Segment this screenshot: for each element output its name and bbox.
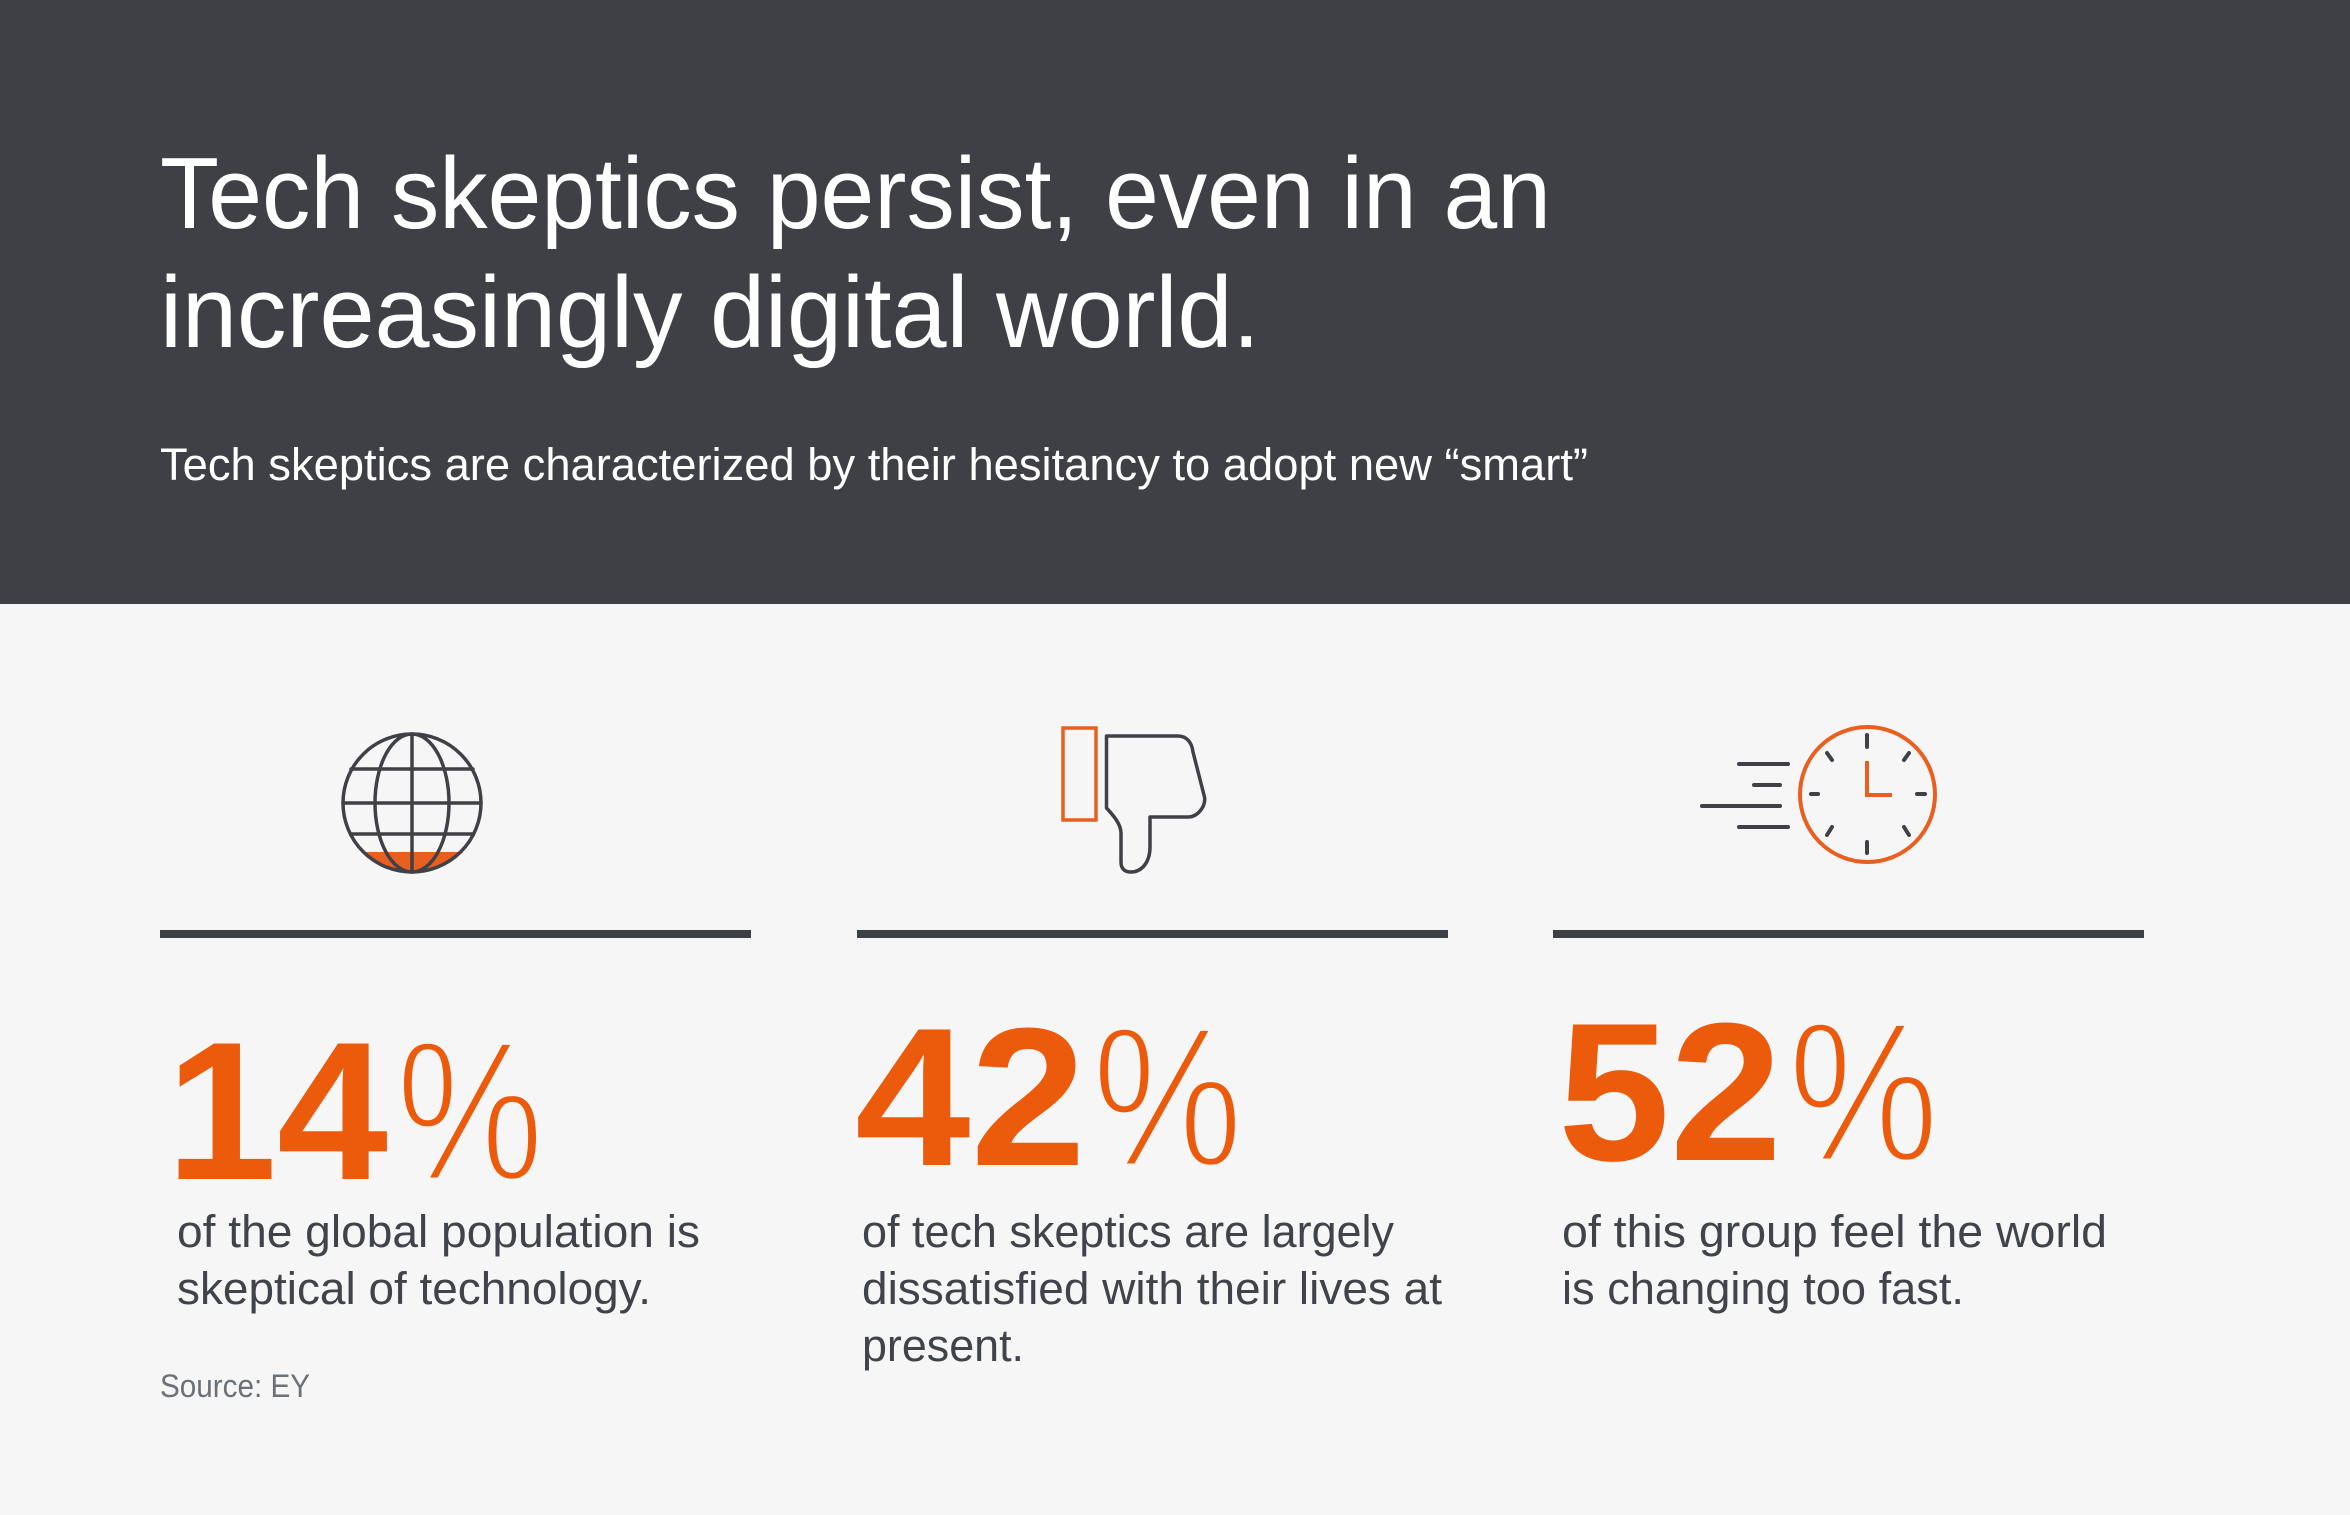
description: skeptical of technology. (177, 1263, 651, 1314)
subtitle: Tech skeptics are characterized by their hesitancy to adopt new “smart” (160, 439, 1588, 490)
source: Source: EY (160, 1368, 310, 1404)
big number 52%: 52 (1558, 982, 1782, 1202)
divider (857, 930, 1448, 938)
big number 42%: 42 (855, 987, 1086, 1207)
big number 52%: % (1788, 981, 1939, 1204)
big number 14%: 14 (166, 1001, 388, 1221)
description: of this group feel the world (1562, 1206, 2107, 1257)
big number 52% (1558, 981, 1939, 1204)
divider (1553, 930, 2144, 938)
divider (160, 930, 751, 938)
description (1562, 1206, 2107, 1314)
big number 42% (855, 986, 1243, 1209)
big number 14% (166, 1000, 544, 1223)
panel: stat 52% (1553, 727, 2144, 1314)
description: is changing too fast. (1562, 1263, 1964, 1314)
icon: fast clock (1702, 727, 1935, 862)
description: present. (862, 1320, 1024, 1371)
description: of the global population is (177, 1206, 700, 1257)
title: Tech skeptics persist, even in an (160, 138, 1551, 250)
description: of tech skeptics are largely (862, 1206, 1394, 1257)
title: increasingly digital world. (160, 257, 1260, 369)
description: dissatisfied with their lives at (862, 1263, 1443, 1314)
description (177, 1206, 700, 1314)
big number 42%: % (1092, 986, 1243, 1209)
icon: thumbs down (1063, 728, 1205, 872)
panel: stat 42% (855, 728, 1448, 1371)
panel: dark header (0, 0, 2350, 604)
title (160, 138, 1551, 369)
panel: stat 14% (160, 734, 751, 1404)
description (862, 1206, 1443, 1371)
icon: globe (343, 734, 481, 873)
big number 14%: % (396, 1000, 544, 1223)
